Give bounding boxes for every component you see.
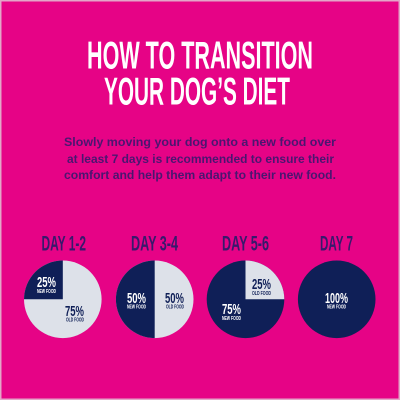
pie chart: 75% new, 25% old: 75% bbox=[222, 302, 241, 318]
pie chart: 75% new, 25% old: NEW FOOD bbox=[222, 316, 241, 322]
pie chart: 100% new bbox=[298, 260, 376, 338]
pie chart: 75% new, 25% old: OLD FOOD bbox=[252, 291, 271, 297]
pie chart: 50% new, 50% old: NEW FOOD bbox=[127, 304, 146, 310]
pie chart: 25% new, 75% old: NEW FOOD bbox=[37, 289, 56, 295]
panel: day 7 bbox=[298, 232, 376, 338]
intro text: Slowly moving your dog onto a new food over bbox=[64, 135, 336, 149]
pie chart: 25% new, 75% old bbox=[24, 260, 102, 338]
pie chart: 50% new, 50% old: 50% bbox=[127, 291, 146, 307]
panel: day 3-4 bbox=[116, 232, 194, 338]
pie chart: 75% new, 25% old bbox=[207, 260, 284, 338]
pie chart: 50% new, 50% old: OLD FOOD bbox=[166, 304, 184, 310]
heading: day 1-2: DAY 1-2 bbox=[42, 232, 86, 256]
intro text: comfort and help them adapt to their new food. bbox=[64, 168, 336, 182]
heading: day 3-4: DAY 3-4 bbox=[131, 232, 178, 256]
intro text: at least 7 days is recommended to ensure their bbox=[67, 152, 334, 166]
pie chart: 100% new: 100% bbox=[325, 291, 348, 307]
panel: day 1-2 bbox=[24, 232, 102, 338]
heading: day 7: DAY 7 bbox=[320, 232, 353, 256]
pie chart: 75% new, 25% old: 25% bbox=[252, 277, 271, 293]
intro text bbox=[64, 135, 336, 182]
pie chart: 100% new: NEW FOOD bbox=[327, 304, 346, 310]
title bbox=[87, 34, 313, 114]
pie chart: 50% new, 50% old bbox=[116, 260, 194, 338]
pie chart: 25% new, 75% old: 75% bbox=[65, 304, 84, 320]
panel: day 5-6 bbox=[207, 232, 284, 338]
heading: day 5-6: DAY 5-6 bbox=[222, 232, 269, 256]
pie chart: 50% new, 50% old: 50% bbox=[165, 291, 184, 307]
pie chart: 25% new, 75% old: 25% bbox=[37, 275, 56, 291]
pie chart: 25% new, 75% old: OLD FOOD bbox=[66, 318, 84, 324]
